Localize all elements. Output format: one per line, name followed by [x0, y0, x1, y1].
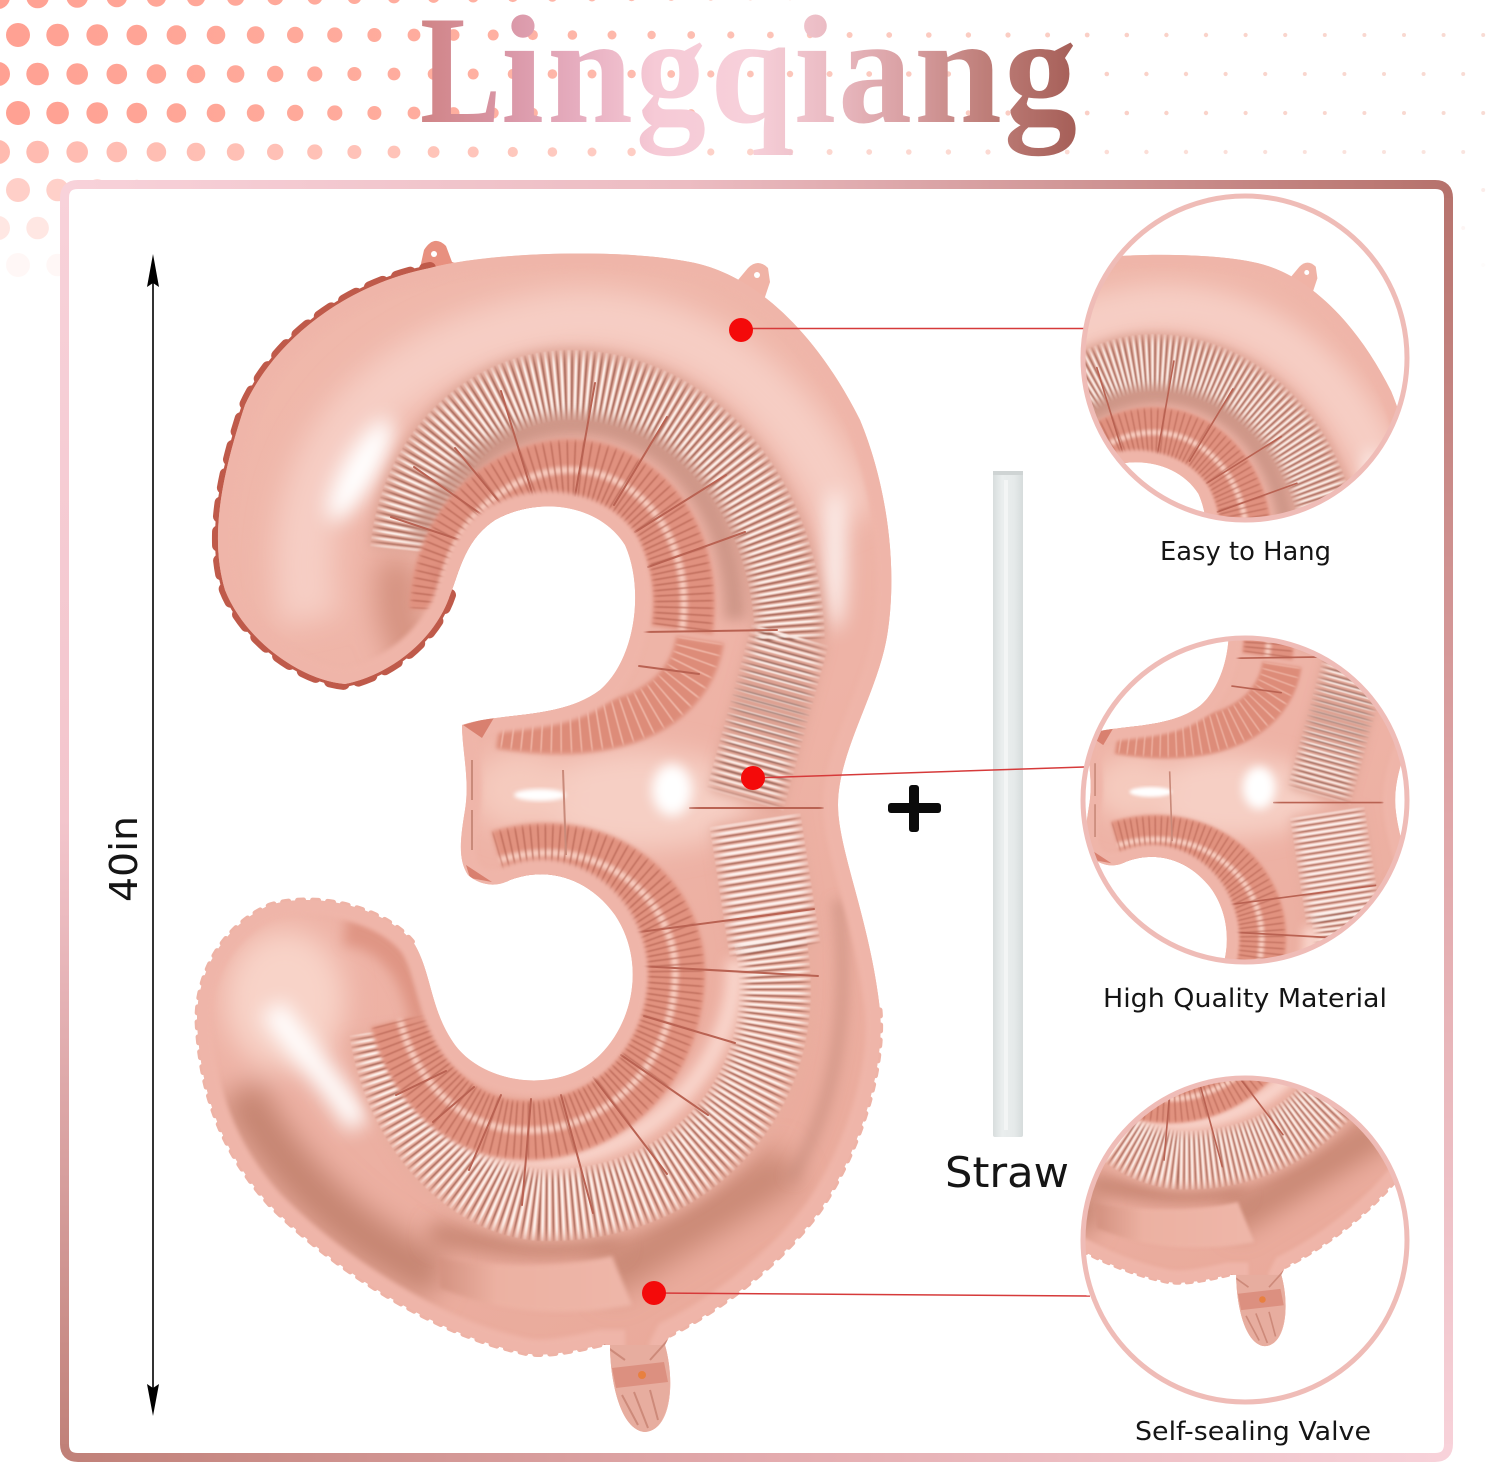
callout line: easy to hang — [741, 328, 1084, 330]
foil seams — [391, 383, 823, 1213]
title: brand name — [420, 0, 1077, 156]
straw — [993, 471, 1023, 1137]
base tone under ribs — [385, 385, 790, 1205]
plus sign — [888, 785, 941, 832]
reflection bands between ribs and copper — [410, 425, 843, 1180]
callout dot: middle — [741, 766, 765, 790]
callout dot: bottom — [642, 1281, 666, 1305]
label: self-sealing valve: Self-sealing Valve — [1135, 1417, 1371, 1447]
bottom foil trapezoid — [438, 1256, 632, 1312]
height arrow — [147, 254, 159, 1416]
foil rim — [197, 253, 891, 1432]
hanging tab: left — [420, 241, 470, 282]
hanging tab: right — [738, 263, 770, 300]
height label: 40in: 40in — [102, 816, 146, 902]
detail circle: self-sealing valve — [1080, 1076, 1410, 1404]
label: high quality material: High Quality Material — [1103, 984, 1387, 1014]
panel: gradient frame — [64, 184, 1449, 1458]
balloon: rose gold number 3 — [180, 230, 910, 1450]
callout line: high quality material — [753, 767, 1084, 778]
shading: foil highlights and shadows — [225, 319, 850, 1312]
detail circle: easy to hang — [834, 195, 1432, 1236]
straw label: Straw — [945, 1148, 1069, 1197]
detail circle: high quality material — [1080, 636, 1410, 1346]
scalloped dark edge: upper left — [218, 268, 450, 684]
background halftone dots — [0, 0, 1485, 277]
callout line: self-sealing valve — [654, 1293, 1090, 1296]
waist knot detail — [463, 716, 692, 882]
copper inner band around holes — [345, 470, 700, 1130]
label: easy to hang: Easy to Hang — [1160, 537, 1331, 567]
inflation valve — [604, 1340, 670, 1432]
callout dot: top — [729, 318, 753, 342]
ribbed bands: arcs and waist — [385, 385, 790, 1205]
balloon body — [180, 230, 910, 1450]
scalloped edge: foil rim — [197, 900, 881, 1354]
